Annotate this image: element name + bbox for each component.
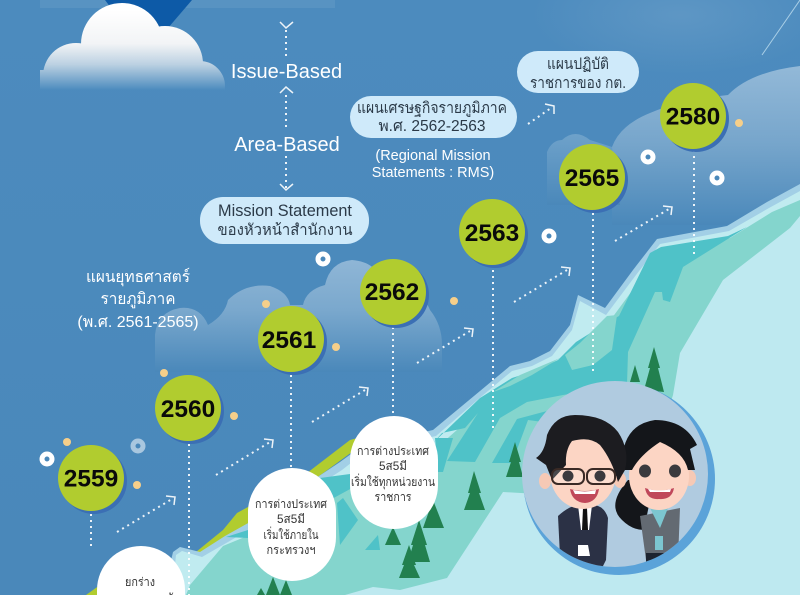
arrow 2 (216, 439, 273, 475)
mint base (186, 200, 800, 595)
oval: 2561 note: เริ่มใช้ภายใน (264, 526, 318, 542)
oval: 2561 note (248, 468, 336, 581)
top lighter strip (40, 0, 335, 8)
ridge pale band (172, 191, 800, 595)
tree 10 (280, 580, 292, 595)
pill: action plan: ราชการของ กต. (530, 75, 626, 92)
oval: 2561 note: การต่างประเทศ (255, 497, 327, 511)
green slope (196, 436, 365, 556)
tree 2 (630, 365, 640, 382)
year badge 2560 (155, 375, 224, 444)
label: Issue-Based: Issue-Based (231, 61, 342, 83)
oval: 2562 note (350, 416, 438, 529)
year badge 2560: 2560 (161, 396, 215, 423)
cloud: right background (612, 66, 800, 225)
cloud: right small lobe (547, 134, 620, 205)
oval: 2561 note: กระทรวงฯ (266, 543, 316, 557)
top dark blue shape (105, 0, 192, 28)
circle background (522, 381, 708, 567)
text: RMS note: Statements : RMS) (372, 165, 494, 181)
arrow 4 (417, 328, 473, 363)
tree 7 (399, 545, 420, 578)
text: regional strategy: (พ.ศ. 2561-2565) (77, 314, 199, 331)
oval: 2561 note: 5ส5มี (277, 512, 305, 526)
tree 3 (506, 442, 523, 477)
oval: draft (97, 546, 185, 595)
mint patch (565, 315, 617, 370)
ring markers (42, 152, 722, 464)
pill: Mission Statement (200, 197, 369, 244)
teal sliver (435, 438, 453, 472)
year badge 2562 (360, 259, 429, 328)
teal facet (337, 498, 358, 545)
white cloud (40, 3, 225, 88)
oval: 2562 note: เริ่มใช้ทุกหน่วยงาน (351, 473, 435, 490)
year badge 2580 (660, 83, 729, 152)
arrow 6 (615, 206, 672, 241)
teal facet left (320, 474, 352, 500)
man (536, 415, 626, 568)
year badge 2563: 2563 (465, 220, 519, 247)
circle portrait (522, 381, 715, 575)
mint sliver under ridge (493, 358, 560, 392)
pale foreground (345, 216, 800, 595)
mountain range (86, 184, 800, 595)
tree 4 (464, 471, 485, 510)
pill: regional economic plan (350, 96, 517, 138)
trees (257, 347, 664, 595)
tree 5 (423, 500, 444, 528)
pill: regional economic plan: พ.ศ. 2562-2563 (378, 118, 486, 135)
text: regional strategy: รายภูมิภาค (100, 291, 176, 309)
pill: action plan: แผนปฏิบัติ (547, 56, 609, 73)
ridge outer band (163, 184, 800, 595)
tree 1 (644, 347, 664, 392)
year badge 2580: 2580 (666, 104, 720, 130)
arrow 1 (117, 496, 175, 532)
tree 8 (385, 527, 401, 545)
tree 11 (257, 588, 265, 595)
year badge 2561: 2561 (262, 327, 316, 354)
text: regional strategy: แผนยุทธศาสตร์ (86, 267, 190, 287)
oval: 2562 note: การต่างประเทศ (357, 444, 429, 458)
double arrow heads (280, 22, 293, 190)
teal patch lower (492, 411, 547, 463)
oval: 2562 note: ราชการ (374, 490, 412, 504)
characters (536, 415, 697, 573)
oval: draft: ยกร่าง (125, 575, 155, 589)
peach dots (63, 119, 743, 489)
year badge 2565: 2565 (565, 165, 619, 192)
oval: 2562 note: 5ส5มี (379, 459, 407, 473)
year badge 2561 (258, 306, 327, 375)
tree 6 (408, 520, 430, 562)
year badge 2559 (58, 445, 127, 514)
text: regional strategy (77, 267, 199, 331)
label: Area-Based: Area-Based (234, 134, 340, 156)
text: RMS note: (Regional Mission (375, 148, 491, 164)
teal face main (434, 227, 747, 462)
woman (615, 420, 697, 573)
year badge 2563 (459, 199, 528, 268)
teal wedge (226, 530, 248, 538)
pill: Mission Statement: Mission Statement (218, 202, 352, 220)
arrow 3 (312, 387, 368, 422)
pill: Mission Statement: ของหัวหน้าสำนักงาน (218, 222, 353, 239)
year badge 2562: 2562 (365, 279, 419, 306)
tree 9 (266, 577, 280, 595)
text: RMS note (372, 148, 494, 181)
cloud: centre background (155, 260, 442, 372)
arrow 7 (528, 104, 554, 124)
circle shadow ring (523, 383, 715, 575)
pill: action plan (517, 51, 639, 93)
year badge 2565 (559, 144, 628, 213)
top glow right (530, 0, 800, 75)
vertical dotted timeline connectors (91, 30, 694, 595)
green foothill (86, 585, 110, 595)
thin light line top right (762, 0, 800, 55)
year badge 2559: 2559 (64, 466, 118, 492)
arrow 5 (514, 267, 570, 302)
teal facet small (365, 535, 380, 550)
pill: regional economic plan: แผนเศรษฐกิจรายภูมิภาค (357, 100, 507, 118)
